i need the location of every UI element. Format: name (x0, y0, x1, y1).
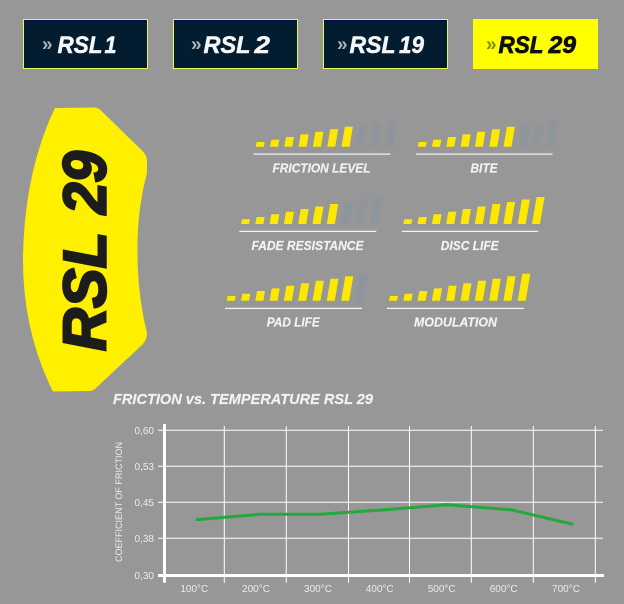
product selector: RSL 29 (active): RSL (498, 32, 544, 59)
rating: disc life (402, 197, 545, 253)
rating: pad life (225, 274, 368, 330)
line chart: friction vs temperature (114, 424, 604, 595)
product selector: RSL 2: 2 (253, 32, 271, 59)
x axis values: 300°C (304, 584, 332, 595)
product selector: RSL 29 (active): » (486, 34, 497, 56)
rating: friction level: FRICTION LEVEL (272, 161, 371, 176)
product selector: RSL 1: RSL (58, 32, 102, 59)
x axis values: 200°C (242, 584, 270, 595)
chart title: FRICTION vs. TEMPERATURE RSL 29 (113, 391, 374, 408)
rating bars: friction level 7 of 10 (256, 120, 397, 147)
y axis values (135, 426, 154, 582)
x axis values: 400°C (366, 584, 394, 595)
product selector: RSL 29 (active) (473, 19, 598, 69)
rating bars: bite 7 of 10 (418, 120, 559, 147)
product selector: RSL 2: RSL (204, 32, 250, 59)
rating: bite (416, 120, 559, 176)
y axis values: 0,60 (135, 426, 154, 437)
y axis values: 0,38 (135, 534, 154, 545)
x axis values: 500°C (428, 584, 456, 595)
y axis values: 0,30 (135, 571, 154, 582)
product selector: RSL 2: » (191, 34, 202, 56)
rating bars: disc life 10 of 10 (403, 197, 545, 224)
y axis title: COEFFICIENT OF FRICTION (114, 442, 125, 562)
rating: bite: BITE (470, 161, 498, 176)
brake pad illustration: RSL (52, 232, 118, 351)
rating: fade resistance: FADE RESISTANCE (252, 238, 364, 253)
product selector: RSL 19: RSL (350, 32, 396, 59)
rating bars: fade resistance 7 of 10 (241, 197, 382, 224)
x axis values: 700°C (552, 584, 580, 595)
x axis values: 100°C (180, 584, 208, 595)
rating: modulation (387, 274, 530, 330)
product selector: RSL 19: » (337, 34, 348, 56)
rating bars: modulation 10 of 10 (389, 274, 530, 301)
y axis values: 0,53 (135, 462, 154, 473)
rating: modulation: MODULATION (414, 315, 498, 330)
rating bars: pad life 9 of 10 (227, 274, 368, 301)
y axis values: 0,45 (135, 498, 154, 509)
x axis values: 600°C (490, 584, 518, 595)
brake pad illustration: 29 (52, 150, 118, 215)
product selector: RSL 29 (active): 29 (547, 32, 577, 59)
brake pad illustration (23, 108, 147, 392)
product selector: RSL 19 (324, 20, 448, 68)
rating: fade resistance (239, 197, 382, 253)
product selector: RSL 1: » (42, 34, 53, 56)
product selector: RSL 1 (24, 20, 148, 68)
friction curve (196, 505, 573, 524)
rating: friction level (254, 120, 397, 176)
product selector: RSL 19: 19 (399, 32, 425, 59)
x axis values (180, 584, 580, 595)
rating: disc life: DISC LIFE (441, 238, 499, 253)
rating: pad life: PAD LIFE (267, 315, 320, 330)
product selector: RSL 2 (174, 20, 298, 68)
chart axes (158, 424, 604, 583)
product selector: RSL 1: 1 (104, 32, 116, 59)
